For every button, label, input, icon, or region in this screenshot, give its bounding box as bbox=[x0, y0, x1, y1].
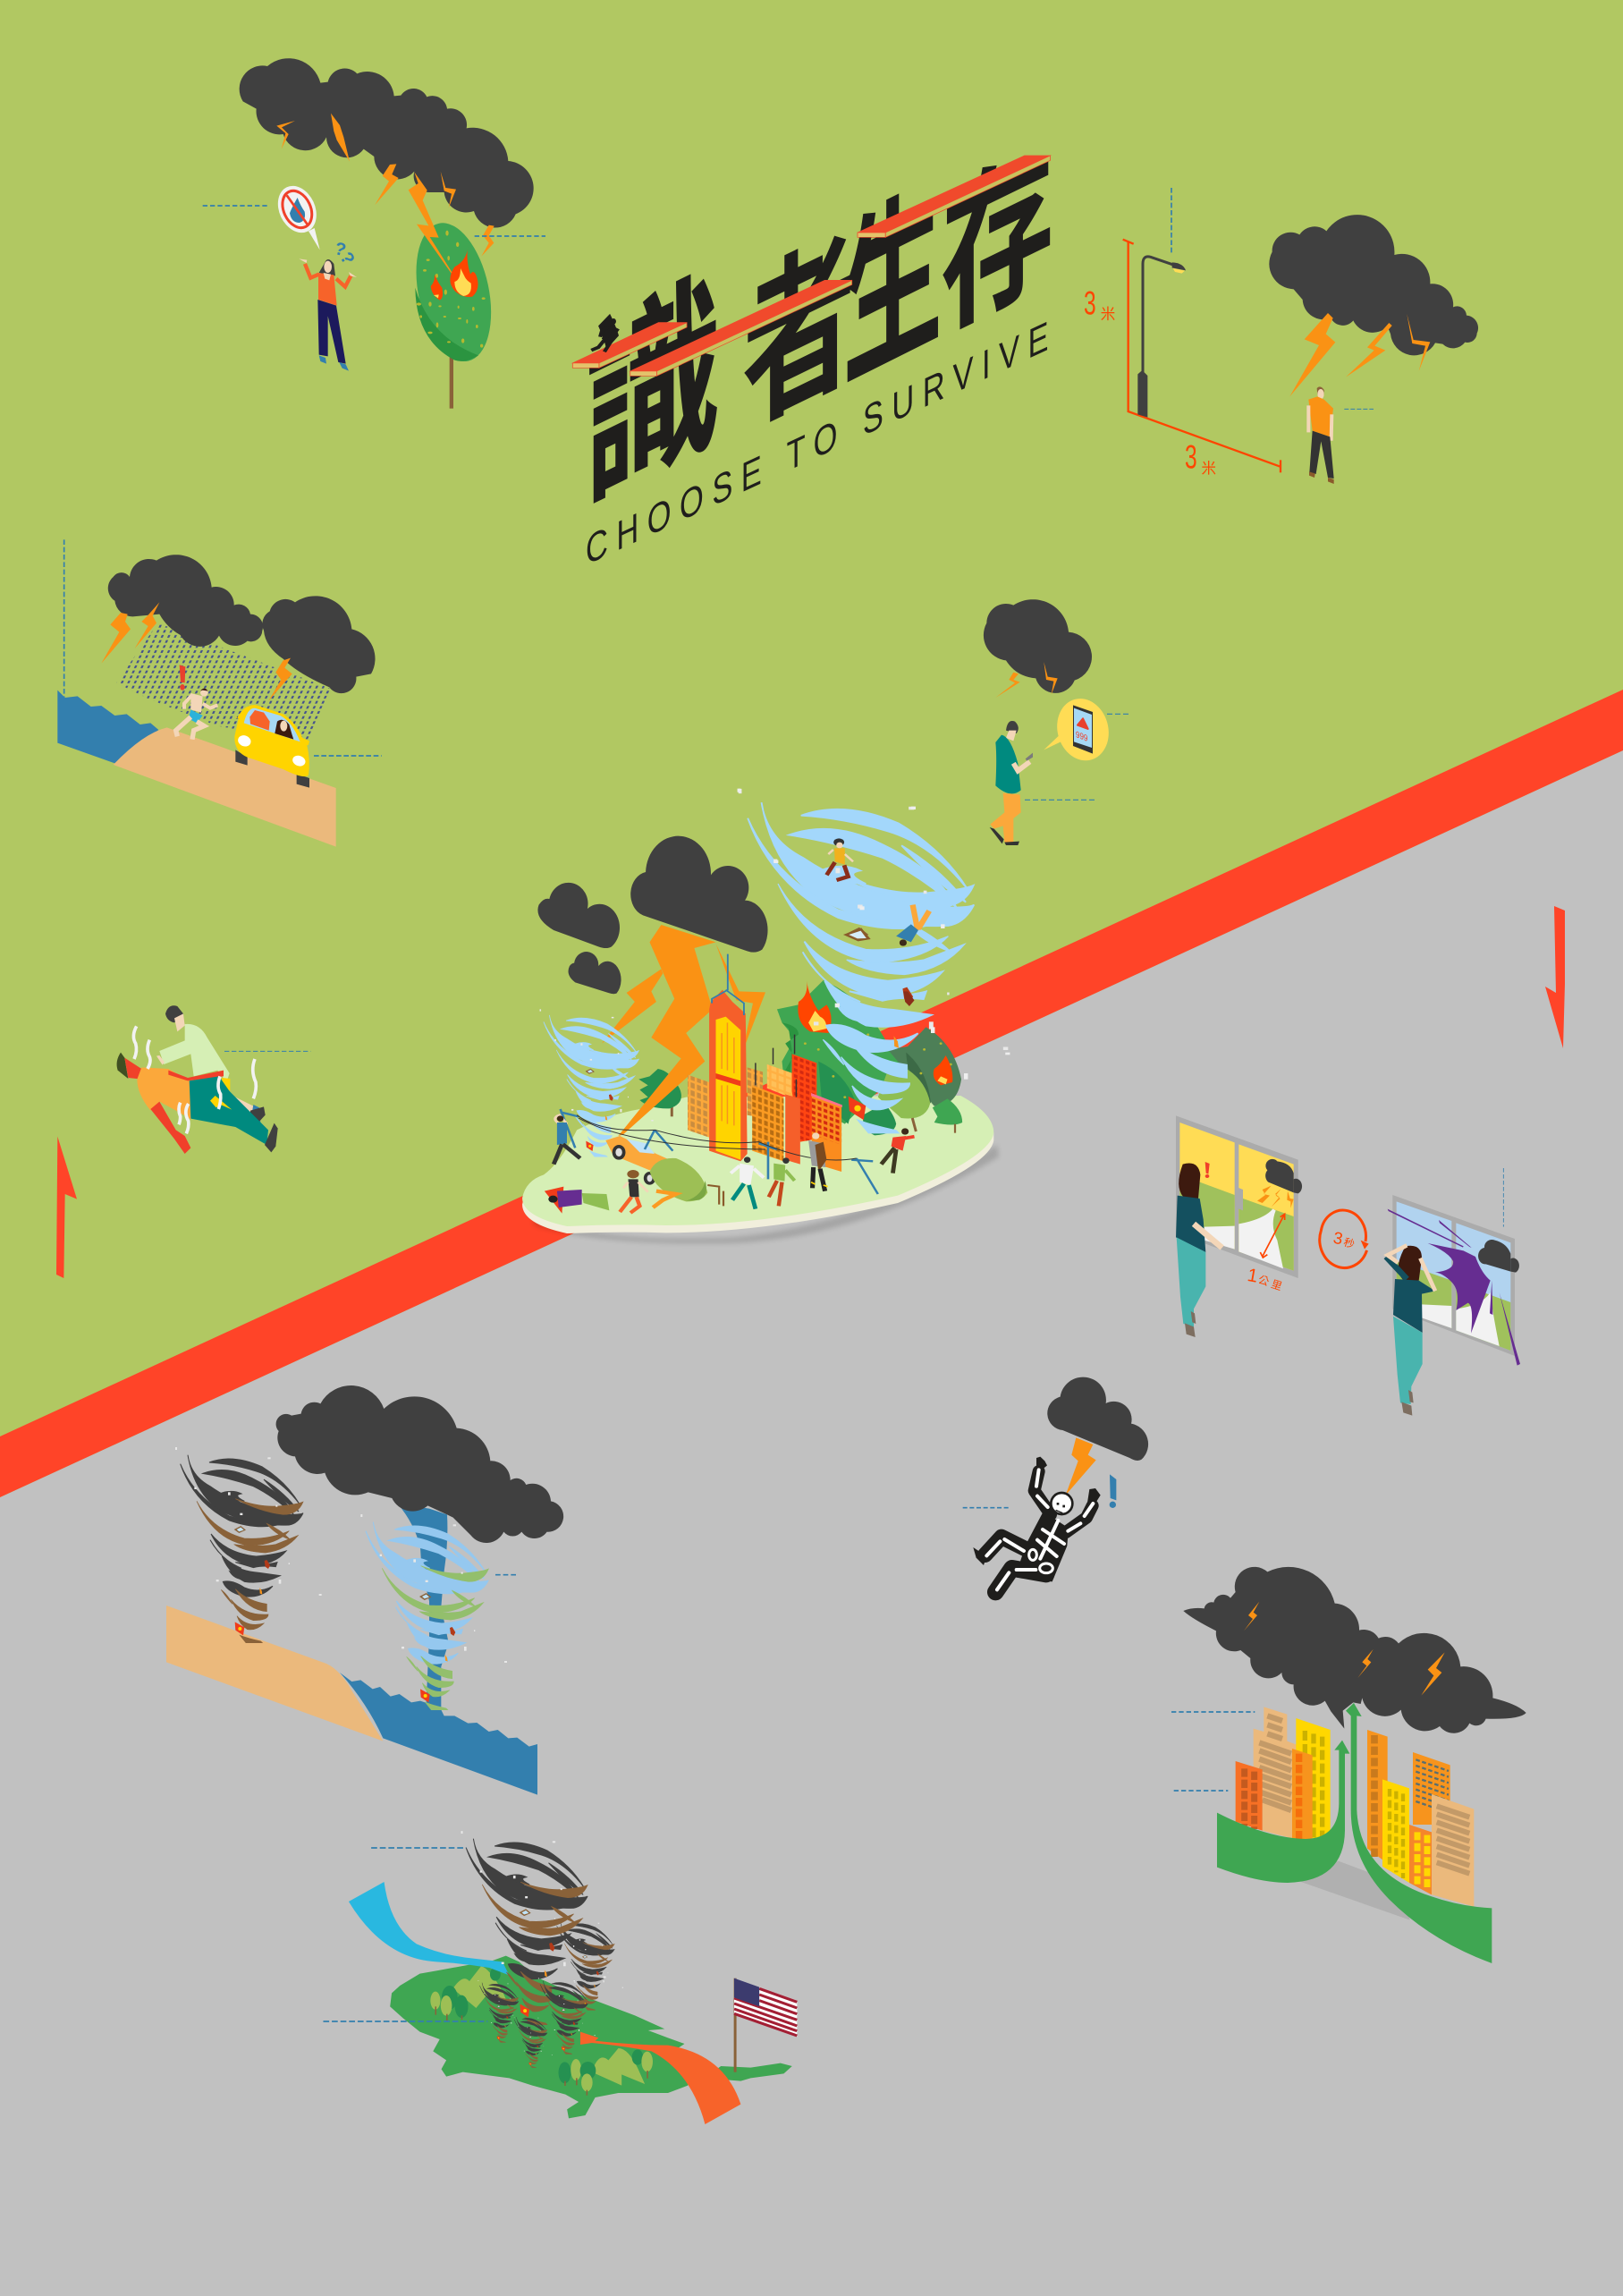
scene: lightning victim first aid bbox=[56, 1005, 310, 1278]
runner white shirt bbox=[731, 1156, 764, 1209]
bolts bbox=[995, 662, 1058, 698]
flames bbox=[431, 247, 478, 301]
bolts bbox=[101, 602, 292, 701]
scene: lightning strikes tree, woman with no-water sign bbox=[203, 58, 545, 409]
bolts bbox=[1289, 313, 1430, 396]
window with thunder, after 3 s bbox=[1392, 1195, 1519, 1356]
buildings left bbox=[1236, 1707, 1331, 1841]
leader lines bbox=[203, 206, 545, 236]
cold air arrow bbox=[349, 1882, 509, 1975]
scene: leave the beach, stay in car bbox=[57, 539, 382, 847]
victim bbox=[117, 1053, 278, 1154]
leader line bbox=[495, 1572, 517, 1577]
sand bank bbox=[166, 1606, 383, 1741]
red down arrow bbox=[1545, 906, 1565, 1048]
island edge bbox=[522, 1133, 993, 1233]
warm air arrow bbox=[580, 2032, 740, 2124]
small tornado bbox=[540, 1009, 654, 1156]
scene: keep 3 metres from lamp post bbox=[1084, 188, 1478, 484]
island shadow bbox=[534, 1145, 999, 1243]
tree bbox=[405, 216, 503, 409]
buildings right bbox=[1367, 1730, 1474, 1907]
labels 3米: 米 bbox=[1201, 460, 1216, 477]
alert bubble with phone: 999 bbox=[1076, 729, 1087, 743]
land tornado bbox=[175, 1447, 322, 1643]
storm cloud bbox=[276, 1385, 563, 1543]
map of USA bbox=[390, 1956, 792, 2118]
label 1公里: 1 bbox=[1246, 1265, 1259, 1287]
central scene: island with storm, tornadoes and city bbox=[522, 789, 1010, 1243]
red diagonal band bbox=[0, 690, 1623, 1497]
storm cloud bbox=[240, 58, 534, 228]
red up arrow bbox=[56, 1137, 77, 1278]
scene: skeleton struck by lightning bbox=[963, 1377, 1148, 1592]
person under bush bbox=[653, 1191, 676, 1207]
man in orange shirt bbox=[1308, 386, 1334, 484]
exclamation bbox=[1205, 1162, 1210, 1178]
lamp post bbox=[1137, 257, 1186, 418]
question marks: ? bbox=[335, 249, 359, 268]
3 second cycle bbox=[1317, 1208, 1369, 1270]
helper figure bbox=[156, 1005, 266, 1126]
labels 3米: 米 bbox=[1101, 306, 1115, 323]
front trees bbox=[863, 1098, 962, 1135]
utility poles and wires bbox=[561, 1109, 878, 1194]
woman at window 2 bbox=[1386, 1245, 1435, 1416]
label 1公里 bbox=[1246, 1265, 1283, 1292]
title: 識者生存: 者 bbox=[742, 169, 856, 470]
skeleton body bbox=[973, 1457, 1101, 1592]
large tornado bbox=[461, 1831, 606, 2025]
platform 2 bbox=[630, 280, 852, 376]
scene: man on phone with 999 alert bbox=[984, 599, 1128, 845]
left green updraft arrow bbox=[1217, 1741, 1349, 1883]
label 1公里: 公 bbox=[1256, 1273, 1271, 1288]
title: 識者生存: 識 bbox=[583, 198, 722, 550]
small tornado 4 bbox=[513, 2015, 553, 2068]
purple thunder burst bbox=[1388, 1209, 1520, 1366]
large tornado bbox=[739, 789, 1008, 1133]
right green updraft arrow bbox=[1346, 1703, 1492, 1963]
scene: updraft between city buildings bbox=[1171, 1567, 1526, 1963]
labels 3米: 3 bbox=[1185, 438, 1197, 476]
water spout swirl bbox=[360, 1514, 507, 1710]
sand bbox=[114, 727, 336, 847]
storm cloud bbox=[1183, 1567, 1526, 1733]
flying debris bbox=[843, 928, 914, 1006]
firefighter carrying child bbox=[808, 1132, 828, 1191]
runner black shirt bbox=[620, 1170, 648, 1213]
subtitle: CHOOSE TO SURVIVE: CHOOSE TO SURVIVE bbox=[586, 312, 1048, 574]
question marks: ? bbox=[333, 239, 348, 260]
3 second cycle: 3 bbox=[1331, 1228, 1344, 1248]
lightning bolts bbox=[276, 114, 495, 257]
leader line bbox=[224, 1050, 310, 1053]
exclamation mark bbox=[180, 665, 185, 690]
smoke wisps bbox=[133, 1026, 256, 1133]
measure lines bbox=[1123, 240, 1281, 472]
scene: land and water spout tornadoes bbox=[166, 1385, 563, 1795]
person flying blue shirt bbox=[896, 905, 929, 946]
storm clouds bbox=[537, 836, 768, 994]
platform 3 bbox=[858, 156, 1051, 237]
city buildings bbox=[688, 954, 842, 1172]
sea bbox=[57, 690, 158, 763]
exclamation bbox=[1110, 1474, 1116, 1508]
storm cloud bbox=[984, 599, 1092, 693]
storm cloud bbox=[1269, 215, 1478, 355]
icon: running figure bbox=[591, 318, 619, 352]
3 second cycle: 秒 bbox=[1342, 1236, 1357, 1251]
title: 識者生存 bbox=[583, 82, 1054, 550]
scene: tornado alley map of USA bbox=[323, 1831, 797, 2124]
fallen bush bbox=[649, 1158, 723, 1206]
leader lines bbox=[1171, 1712, 1255, 1791]
window with storm, 1 km bbox=[1176, 1115, 1302, 1278]
running man blue shirt bbox=[554, 1115, 580, 1165]
lying person bbox=[545, 1187, 609, 1214]
ground shadow bbox=[1301, 1861, 1410, 1920]
island top bbox=[522, 1096, 993, 1226]
lightning main bolt bbox=[602, 925, 765, 1136]
woman at window 1 bbox=[1176, 1164, 1222, 1337]
person flying yellow shirt bbox=[826, 838, 853, 880]
label 1公里: 里 bbox=[1270, 1277, 1283, 1292]
alert bubble with phone bbox=[1044, 693, 1115, 767]
mountains and trees south-east bbox=[559, 2048, 653, 2096]
woman shrugging bbox=[299, 258, 357, 371]
flying debris flecks bbox=[738, 789, 1010, 1080]
speech bubble: no water sign bbox=[271, 180, 324, 250]
overturned car bbox=[605, 1136, 670, 1185]
sea bbox=[340, 1673, 537, 1795]
leader line bbox=[1344, 408, 1374, 411]
yellow car with driver bbox=[234, 705, 309, 788]
leader line bbox=[963, 1505, 1009, 1510]
title: 識者生存: 存 bbox=[941, 82, 1054, 371]
labels 3米 bbox=[1084, 284, 1216, 477]
small tornado 5 bbox=[538, 1978, 596, 2055]
second large tornado bbox=[554, 1918, 623, 2010]
leader line top bbox=[1169, 188, 1173, 254]
leader lines bbox=[323, 1848, 487, 2021]
man bbox=[990, 721, 1033, 845]
title platforms and runner bbox=[572, 156, 1051, 376]
labels 3米: 3 bbox=[1084, 284, 1096, 322]
large back trees bbox=[777, 980, 961, 1124]
small tornado 3 bbox=[478, 1980, 525, 2043]
question marks bbox=[333, 239, 359, 268]
bolts in cloud bbox=[1244, 1602, 1445, 1696]
mountains and trees north-west bbox=[430, 1966, 509, 2021]
large bolt striking tree bbox=[409, 172, 463, 291]
rain pattern bbox=[116, 623, 331, 741]
flag bbox=[734, 1978, 797, 2072]
platform 1 bbox=[572, 323, 687, 368]
leader lines bbox=[1025, 714, 1128, 800]
running swimmer bbox=[176, 689, 217, 740]
scene: two windows, count 3 seconds bbox=[1176, 1115, 1520, 1416]
water spout core bbox=[398, 1504, 449, 1708]
small tree left bbox=[638, 1069, 681, 1116]
storm clouds bbox=[108, 555, 376, 693]
man red shirt bbox=[882, 1128, 914, 1173]
runner green shirt bbox=[769, 1157, 795, 1206]
background: grey lower half bbox=[0, 750, 1623, 2296]
leader lines bbox=[64, 539, 382, 756]
title: 識者生存: 生 bbox=[842, 117, 943, 427]
leader line bbox=[1502, 1168, 1505, 1227]
bolt bbox=[1066, 1437, 1096, 1495]
fire on trees bbox=[798, 981, 952, 1085]
storm cloud bbox=[1047, 1377, 1148, 1461]
